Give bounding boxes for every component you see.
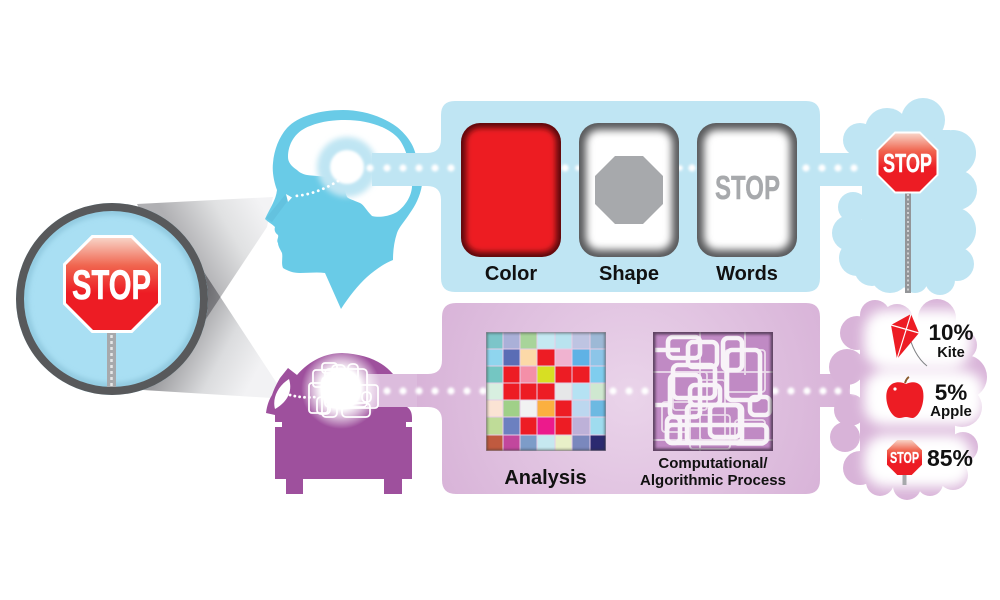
card: words (697, 123, 797, 257)
robot (266, 349, 417, 494)
projection cones (137, 197, 278, 398)
robot brain glow (301, 349, 381, 429)
head glow (317, 137, 377, 197)
card: shape (579, 123, 679, 257)
analysis colour grid (486, 332, 606, 451)
upper beam dots (366, 164, 858, 172)
kite figure: 10% (928, 320, 974, 345)
lens sign post (107, 333, 116, 387)
upper panel: human perception (400, 101, 850, 292)
robot brain circuits (309, 363, 378, 417)
gaze dotted arrow (286, 181, 338, 202)
icon: small stop sign (887, 440, 922, 485)
apple figure: 5% (935, 380, 967, 405)
lens stop sign: STOP (72, 261, 151, 308)
robot eye (274, 379, 290, 409)
icon: apple (886, 377, 923, 418)
grey stop word: STOP (715, 169, 780, 206)
stop figure: 85% (927, 445, 973, 471)
head beam (372, 153, 422, 186)
robot scan dots (290, 395, 316, 397)
robot beam (367, 374, 417, 407)
robot ear slots (275, 422, 413, 427)
upper result stop sign (876, 132, 938, 293)
label: words: Words (716, 263, 778, 285)
label: computational process: Computational/ (658, 455, 768, 472)
label: shape: Shape (599, 263, 659, 285)
upper cloud (832, 98, 977, 295)
cloud highlights (864, 310, 984, 487)
upper result stop sign: STOP (883, 148, 932, 178)
human head (265, 110, 422, 309)
apple figure: Apple (930, 403, 972, 420)
nose shading (266, 195, 289, 222)
label: computational process: Algorithmic Process (640, 472, 786, 489)
kite figure: Kite (937, 345, 965, 361)
lower panel: machine analysis (360, 303, 850, 494)
grey octagon (595, 156, 663, 224)
apple figure (930, 380, 972, 420)
lower beam dots (383, 387, 858, 395)
lens stop sign (63, 235, 161, 333)
magnified stop sign lens (16, 203, 208, 395)
icon: small stop sign: STOP (890, 450, 919, 467)
lower cloud (829, 299, 987, 500)
icon: kite (891, 314, 927, 366)
algorithm process panel (653, 332, 773, 451)
kite figure (928, 320, 974, 361)
label: color: Color (485, 263, 537, 285)
card: color (461, 123, 561, 257)
label: analysis: Analysis (504, 467, 587, 489)
label: computational process (640, 455, 786, 489)
